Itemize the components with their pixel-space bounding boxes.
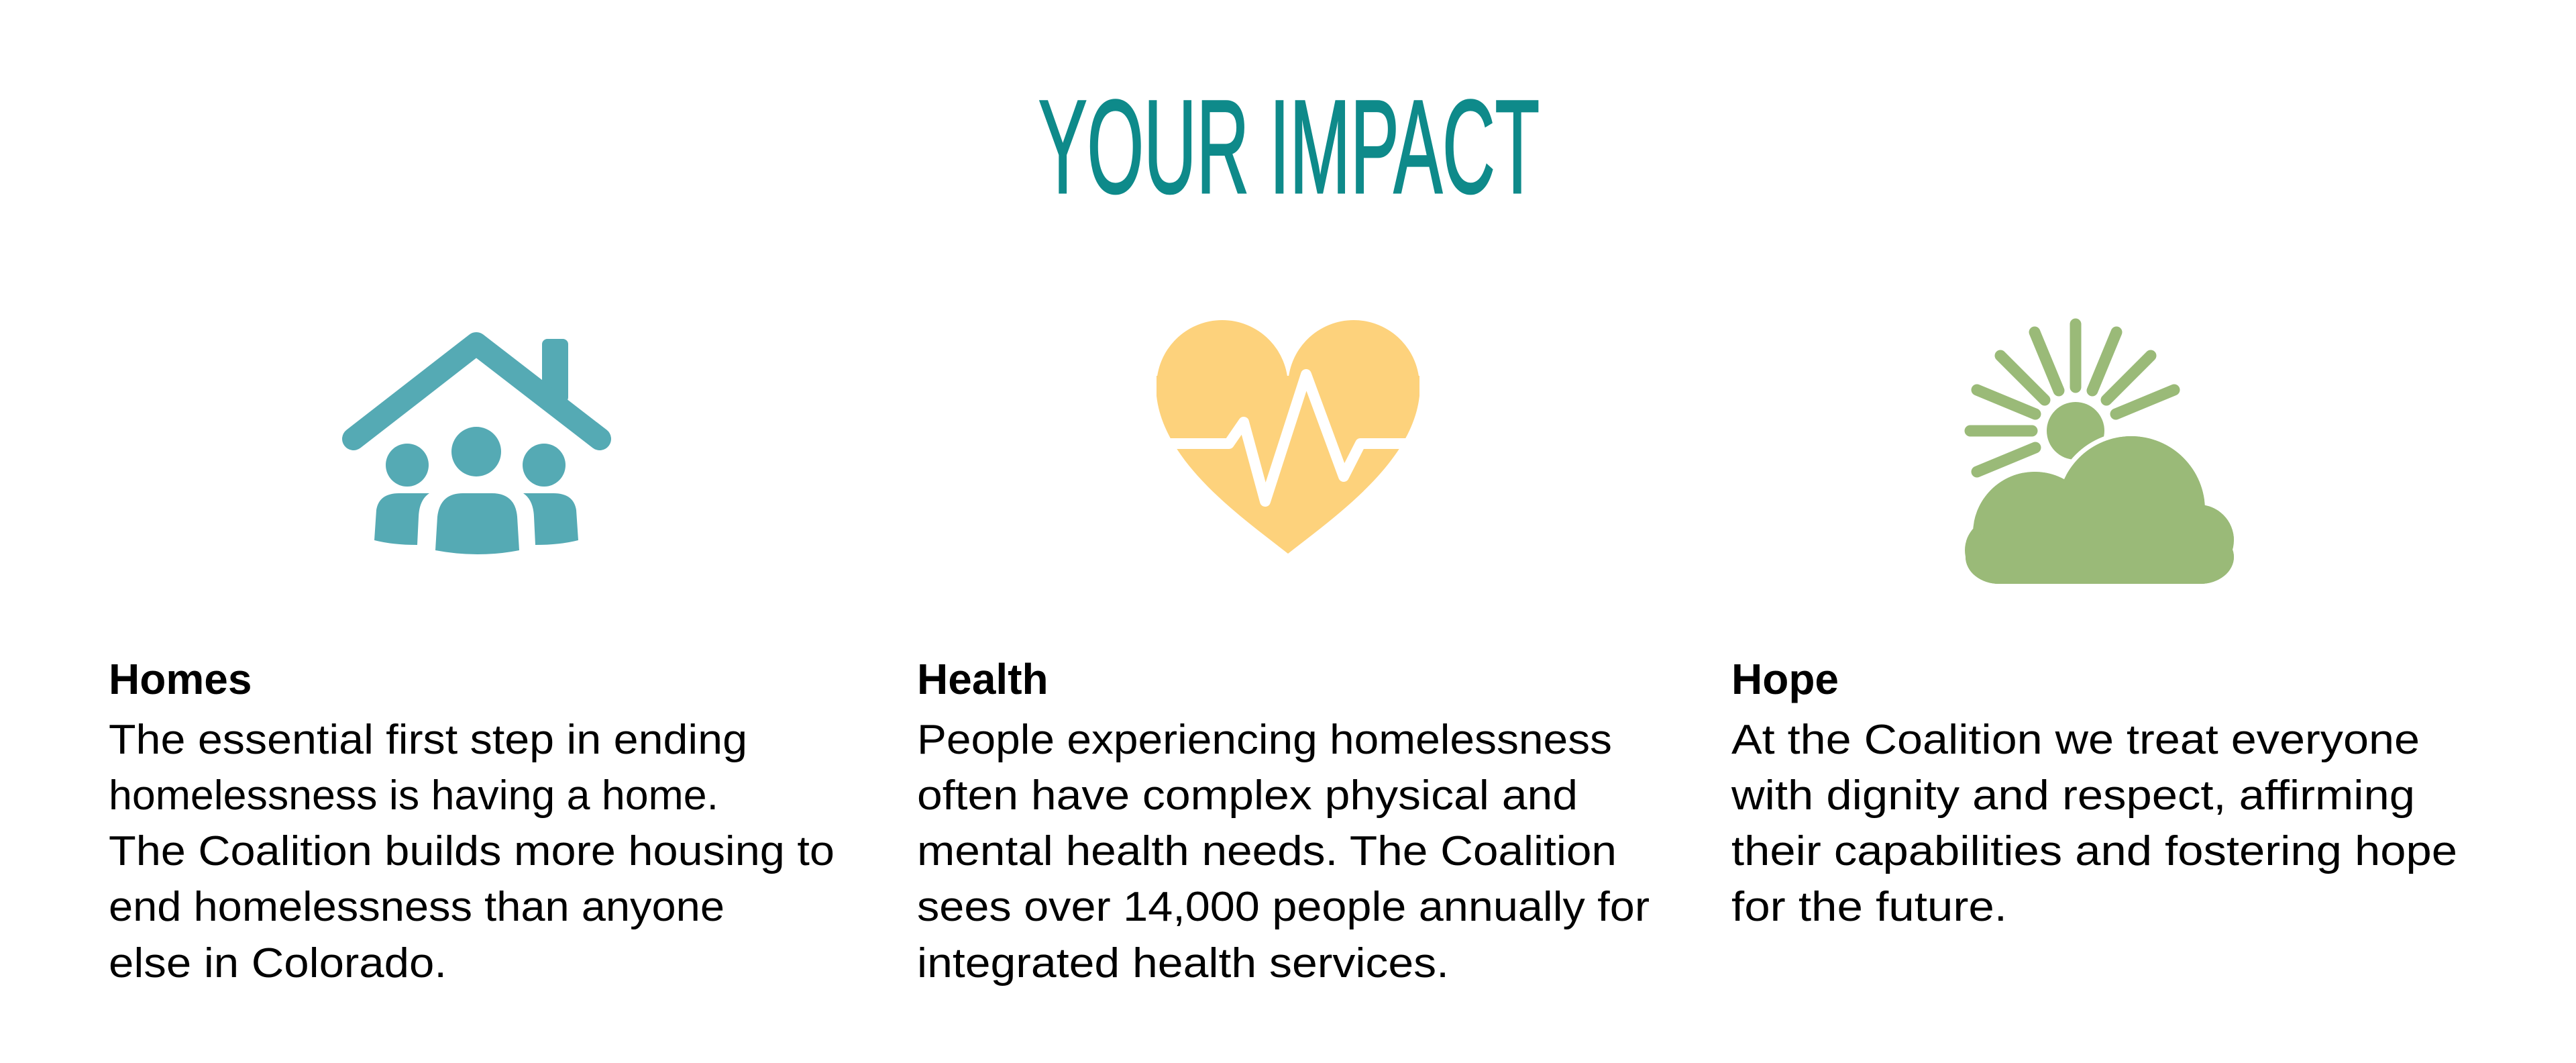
text block: Health xyxy=(917,655,1650,986)
text block: Hope: Hope xyxy=(1731,655,1839,703)
icon: heart with pulse xyxy=(1140,320,1436,554)
text block: Hope xyxy=(1731,655,2457,930)
text block: Health: sees over 14,000 people annually for xyxy=(917,884,1650,930)
text block: Homes: The Coalition builds more housing to xyxy=(109,828,835,874)
text block: Health: integrated health services. xyxy=(917,940,1449,986)
text block: Homes: end homelessness than anyone xyxy=(109,884,724,930)
title: YOUR IMPACT xyxy=(1038,72,1540,221)
text block: Hope: with dignity and respect, affirming xyxy=(1731,772,2415,819)
text block: Health: often have complex physical and xyxy=(917,772,1578,819)
text block: Homes: else in Colorado. xyxy=(109,940,447,986)
text block: Homes: Homes xyxy=(109,655,252,703)
icon: sun behind cloud xyxy=(1965,324,2234,595)
text block: Homes xyxy=(109,655,835,986)
text block: Hope: At the Coalition we treat everyone xyxy=(1731,717,2420,763)
text block: Health: Health xyxy=(917,655,1049,703)
text block: Homes: The essential first step in ending xyxy=(109,717,747,763)
text block: Hope: their capabilities and fostering hope xyxy=(1731,828,2457,874)
text block: Health: People experiencing homelessness xyxy=(917,717,1612,763)
text block: Homes: homelessness is having a home. xyxy=(109,772,718,819)
text block: Hope: for the future. xyxy=(1731,884,2007,930)
text block: Health: mental health needs. The Coalition xyxy=(917,828,1617,874)
icon: house with family xyxy=(354,339,600,554)
